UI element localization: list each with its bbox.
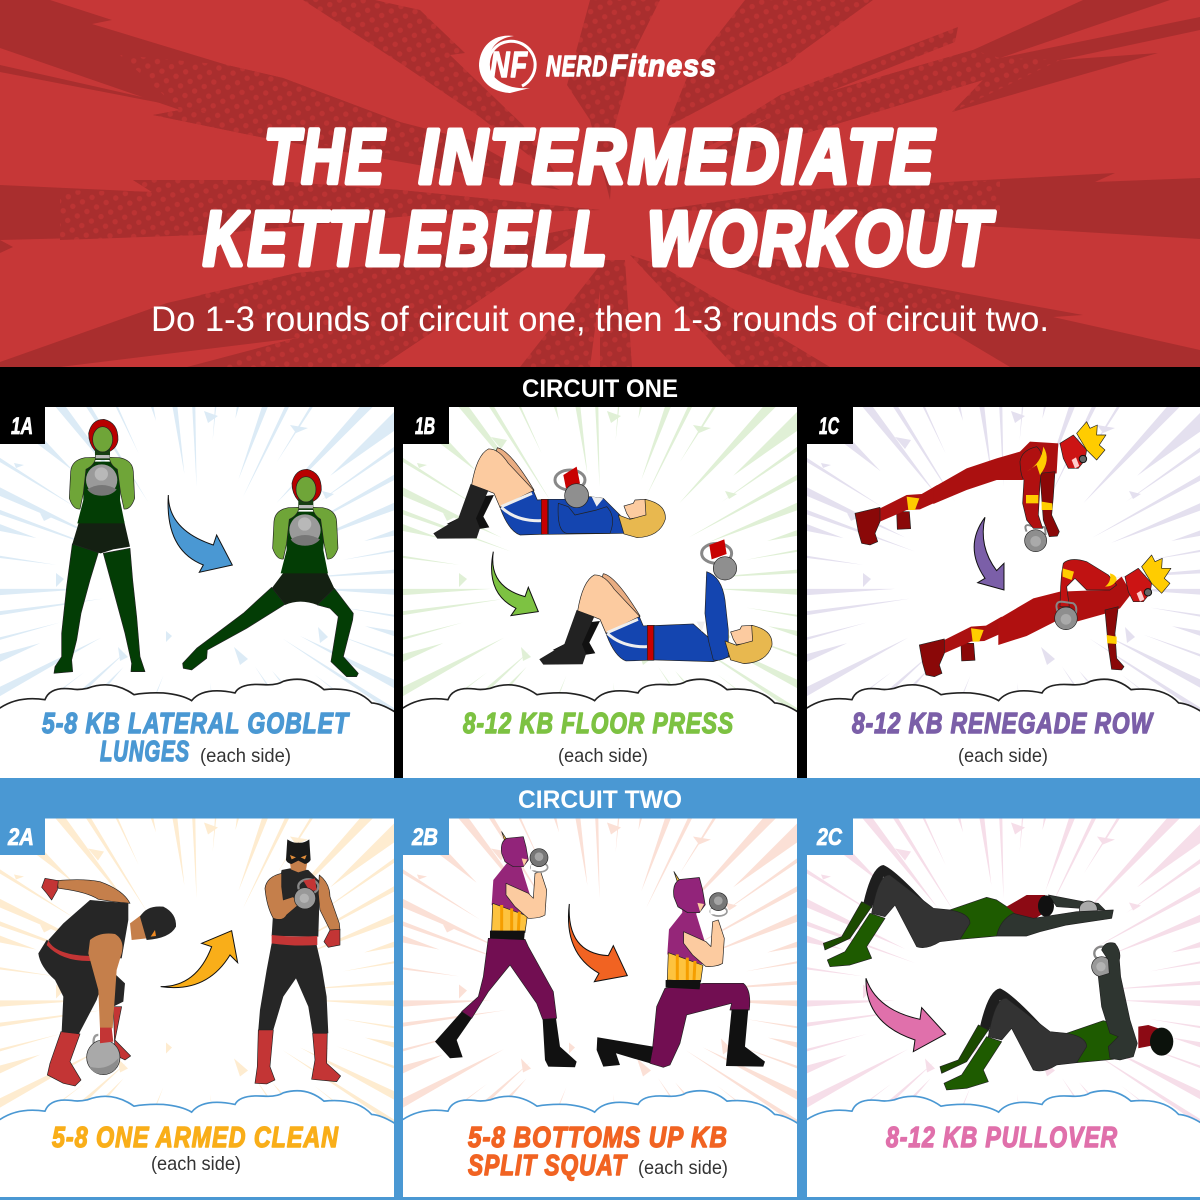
figure: lunge start and end (54, 419, 358, 677)
caption 2A: 5-8 ONE ARMED CLEAN (52, 1122, 339, 1154)
caption 2A (52, 1122, 339, 1175)
caption cloud (803, 1091, 1200, 1198)
caption 1A: 5-8 KB LATERAL GOBLET (42, 708, 350, 740)
figure: one armed clean start and end (38, 839, 341, 1086)
panel: 1A lateral goblet lunges (0, 407, 394, 778)
caption 1A: (each side) (200, 745, 291, 767)
arrow: orange (568, 904, 627, 982)
arrow: pink (866, 978, 946, 1052)
title (203, 114, 995, 282)
caption cloud (399, 679, 803, 786)
caption 1A (42, 708, 350, 768)
arrow: orange-yellow (161, 931, 238, 988)
arrow: purple (974, 517, 1004, 590)
badge 2B (403, 818, 449, 855)
badge 1B: 1B (415, 413, 435, 440)
heading: circuit one: CIRCUIT ONE (522, 375, 678, 403)
panel: 1C renegade row (807, 407, 1200, 778)
figure: pullover start and end (823, 865, 1173, 1090)
caption 2C: 8-12 KB PULLOVER (886, 1122, 1118, 1154)
logo: NerdFitness: NERD (546, 51, 608, 83)
caption cloud (399, 1091, 803, 1198)
caption 2A: (each side) (151, 1153, 241, 1175)
caption 1A: LUNGES (100, 736, 190, 768)
figure: split squat start and end (435, 832, 765, 1067)
figure: floor press start and end (433, 448, 772, 665)
subtitle: Do 1-3 rounds of circuit one, then 1-3 rounds of circuit two. (151, 300, 1049, 339)
caption 1B: (each side) (558, 745, 648, 767)
header banner (0, 0, 1200, 367)
caption cloud (0, 679, 400, 786)
caption 2B: 5-8 BOTTOMS UP KB (468, 1122, 728, 1154)
badge 1C: 1C (819, 413, 839, 440)
caption 1C: (each side) (958, 745, 1048, 767)
caption cloud (803, 679, 1200, 786)
arrow: green (492, 552, 538, 616)
panel: 2C kb pullover (807, 818, 1200, 1197)
caption 2B: (each side) (638, 1157, 728, 1179)
badge 2C: 2C (816, 824, 843, 851)
title: KETTLEBELL (203, 196, 609, 282)
badge 1B (403, 407, 449, 444)
logo: NerdFitness: NF (490, 44, 528, 85)
bottom border (0, 1198, 1200, 1200)
logo: NerdFitness (479, 36, 717, 93)
caption 1C (852, 708, 1154, 767)
caption 1B: 8-12 KB FLOOR PRESS (463, 708, 734, 740)
panel: 1B floor press (403, 407, 797, 778)
title: THE (264, 114, 386, 200)
heading: circuit two: CIRCUIT TWO (518, 786, 682, 814)
badge 1C (807, 407, 853, 444)
title: WORKOUT (647, 196, 995, 282)
badge 1A (0, 407, 45, 444)
caption 2B: SPLIT SQUAT (468, 1150, 628, 1182)
panel: 2B bottoms up split squat (403, 818, 797, 1197)
logo: NerdFitness: Fitness (610, 48, 717, 83)
caption 1B (463, 708, 734, 767)
badge 2A: 2A (7, 824, 34, 851)
panel: 2A one armed clean (0, 818, 394, 1197)
page backdrop: blue circuit two (0, 778, 1200, 1200)
figure: renegade row start and end (855, 422, 1171, 677)
caption cloud (0, 1091, 400, 1198)
badge 2B: 2B (411, 824, 438, 851)
arrow: blue (168, 495, 232, 572)
caption 2B (468, 1122, 728, 1182)
badge 1A: 1A (11, 413, 33, 440)
title: INTERMEDIATE (419, 114, 936, 200)
badge 2C (807, 818, 853, 855)
badge 2A (0, 818, 45, 855)
page backdrop: black circuit one (0, 367, 1200, 779)
